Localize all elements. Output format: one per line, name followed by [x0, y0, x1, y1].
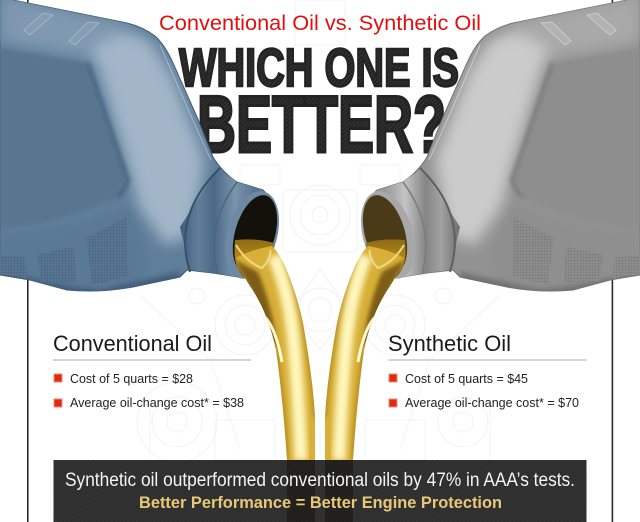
blue bottle: conventional oil	[0, 0, 288, 300]
oil stream: right	[325, 244, 405, 460]
headline	[179, 38, 459, 170]
neck	[180, 168, 275, 277]
bullet: average oil-change cost: Average oil-change cost* = $38	[70, 395, 244, 410]
neck	[365, 168, 460, 277]
headline: WHICH ONE IS	[179, 38, 459, 98]
heading: Synthetic Oil	[388, 331, 511, 356]
bullet: average oil-change cost: Average oil-change cost* = $70	[405, 395, 579, 410]
callout: bottom banner: Synthetic oil outperformed conventional oils by 47% in AAA’s tests.	[65, 470, 575, 491]
oil stream: left	[235, 244, 315, 460]
bullet: cost of 5 quarts: Cost of 5 quarts = $45	[405, 371, 528, 386]
heading: Conventional Oil	[53, 331, 212, 356]
callout: bottom banner	[54, 460, 586, 522]
oil in mouth	[366, 239, 406, 278]
panel: conventional oil	[53, 331, 251, 410]
callout: bottom banner: Better Performance = Better Engine Protection	[139, 493, 502, 512]
headline: BETTER?	[197, 80, 446, 170]
oil in mouth	[234, 239, 274, 278]
bullet: cost of 5 quarts: Cost of 5 quarts = $28	[70, 371, 193, 386]
grey bottle: synthetic oil	[352, 0, 640, 300]
engine blueprint background	[137, 0, 500, 462]
panel: synthetic oil	[388, 331, 586, 410]
title: Conventional Oil vs. Synthetic Oil	[159, 12, 481, 35]
